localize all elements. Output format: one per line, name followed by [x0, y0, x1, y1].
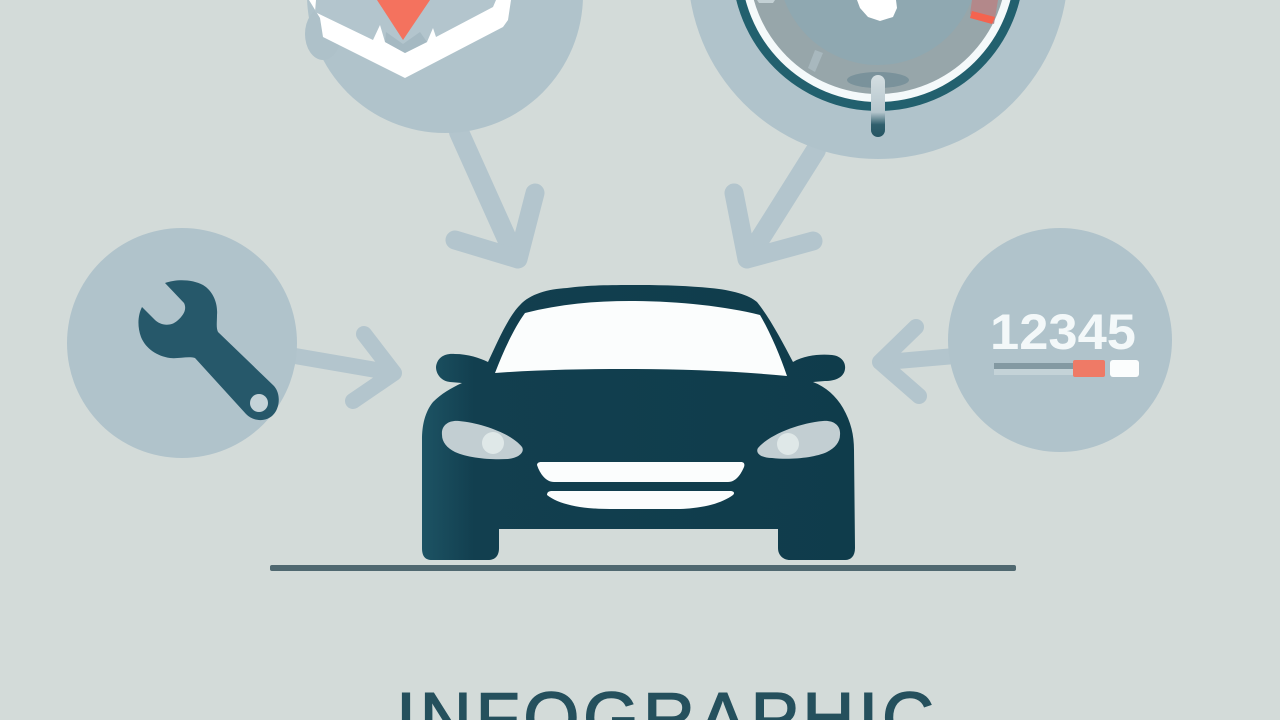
odometer progress bar — [994, 360, 1139, 377]
arrow: gauge to car — [734, 150, 816, 259]
icon: wrench in circle — [67, 228, 297, 458]
arrow: odometer to car — [880, 327, 955, 396]
arrow: shield to car — [455, 132, 535, 259]
upper grille — [537, 462, 744, 482]
illustration: car front view — [422, 285, 855, 560]
road line — [270, 565, 1016, 571]
car body — [422, 285, 855, 560]
icon: shield badge in circle — [305, 0, 583, 133]
odometer digits: 12345 — [990, 304, 1136, 360]
right headlight — [757, 421, 840, 459]
arrow: wrench to car — [295, 334, 394, 401]
icon: odometer in circle — [948, 228, 1172, 452]
lower grille — [547, 491, 734, 509]
left headlight — [442, 421, 523, 459]
windshield — [495, 301, 787, 376]
icon: speedometer gauge in circle — [688, 0, 1068, 159]
